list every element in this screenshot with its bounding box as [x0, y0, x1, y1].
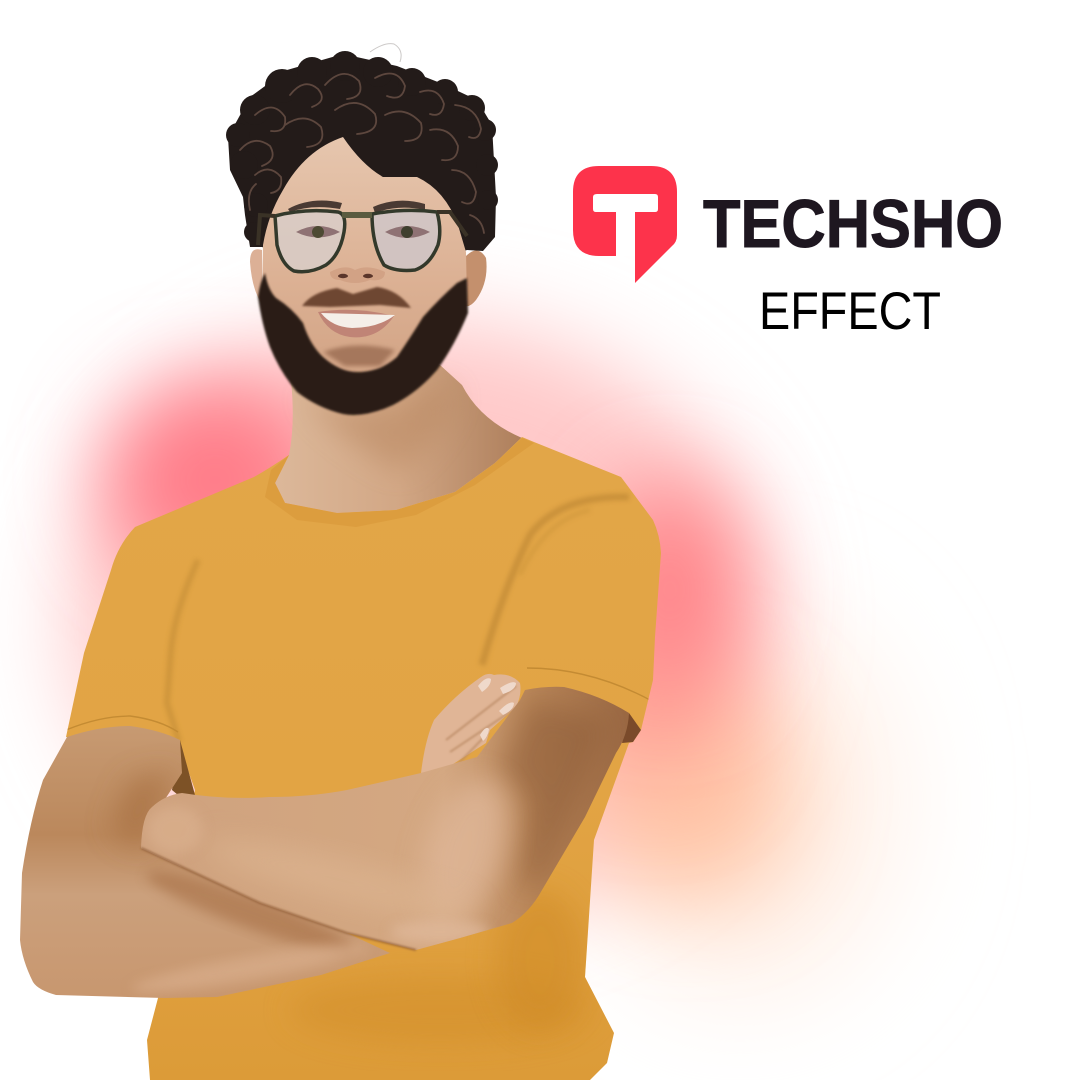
upper forearm	[141, 687, 629, 950]
person with crossed arms	[20, 44, 661, 1080]
glasses	[258, 210, 467, 272]
logo T glyph	[593, 194, 658, 256]
hand on upper arm	[421, 674, 520, 773]
neck shadow	[300, 385, 455, 470]
right ear	[462, 250, 487, 306]
face	[258, 137, 468, 415]
moustache	[302, 287, 411, 308]
t-shirt	[66, 437, 661, 1080]
left ear	[250, 249, 262, 304]
sleeve underside	[622, 713, 641, 743]
brand name: TECHSHO	[703, 186, 1003, 262]
hair	[226, 44, 498, 260]
gap between arm and torso	[172, 740, 195, 795]
lower arm	[20, 726, 390, 1001]
nose	[330, 267, 385, 283]
subtitle: EFFECT	[759, 282, 941, 341]
eyes	[296, 226, 430, 238]
neck	[275, 365, 522, 513]
eyebrows	[288, 201, 425, 213]
shirt collar	[265, 438, 534, 527]
beard	[258, 273, 468, 415]
mouth	[318, 310, 395, 337]
logo mark	[573, 166, 677, 283]
